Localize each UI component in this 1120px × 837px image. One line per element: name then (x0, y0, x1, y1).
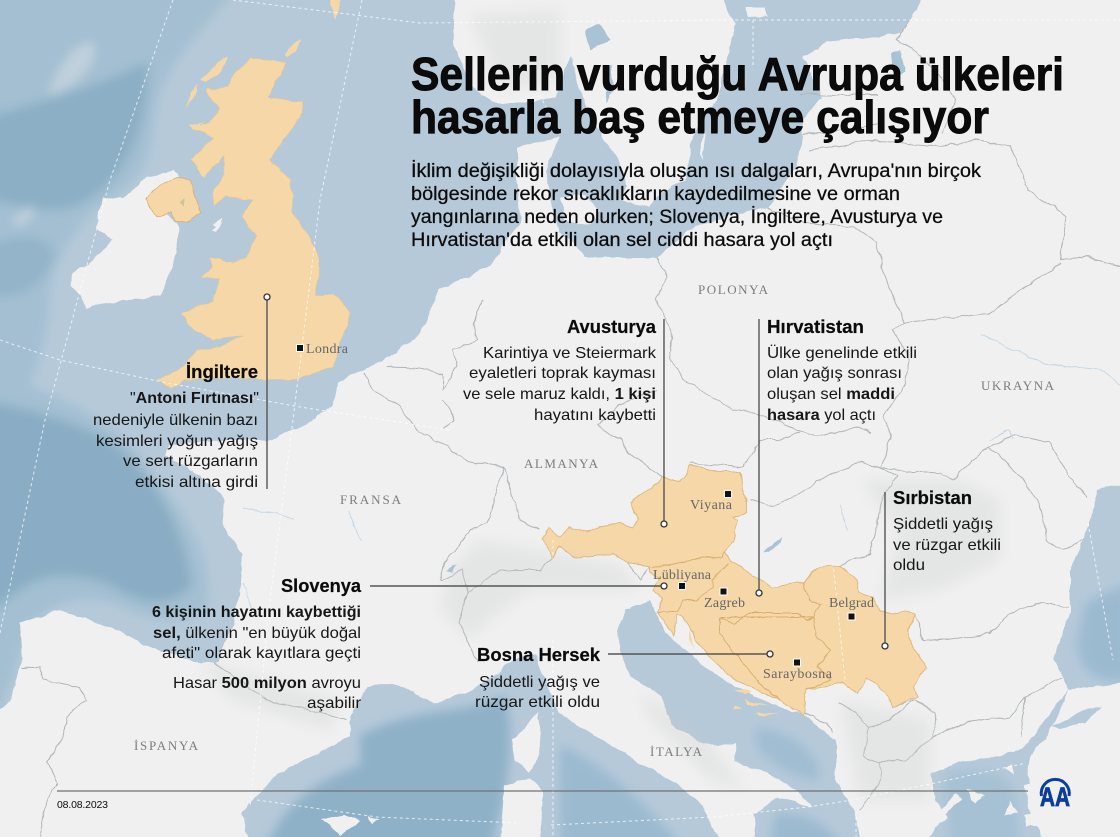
title: Sellerin vurduğu Avrupa ülkeleri (411, 48, 1064, 100)
callout: İngiltere: ve sert rüzgarların (123, 453, 258, 470)
label: Fransa: FRANSA (340, 492, 402, 507)
callout: Sırbistan (882, 488, 1001, 649)
callout: Sırbistan: Sırbistan (893, 488, 972, 508)
intro text: İklim değişikliği dolayısıyla oluşan ısı dalgaları, Avrupa'nın birçok (411, 161, 982, 182)
callout: Avusturya: Karintiya ve Steiermark (483, 345, 657, 362)
mediterranean bathymetry (265, 585, 1120, 837)
region: Britain highlighted (145, 0, 350, 387)
callout: Hırvatistan: olan yağış sonrası (767, 365, 902, 382)
city: Saraybosna: Saraybosna (763, 667, 833, 682)
intro text: Hırvatistan'da etkili olan sel ciddi hasara yol açtı (411, 230, 833, 251)
shape: Scottish islands (187, 0, 343, 178)
callout: Slovenya: Hasar 500 milyon avroyu (173, 675, 361, 692)
city: Viyana (690, 490, 733, 513)
callout: Slovenya: 6 kişinin hayatını kaybettiği (152, 604, 361, 621)
callout: Hırvatistan (756, 317, 917, 596)
label: İtalya: İTALYA (650, 744, 703, 759)
title (411, 48, 1064, 143)
callout: Slovenya: sel, ülkenin "en büyük doğal (153, 625, 361, 642)
label: İspanya: İSPANYA (134, 738, 199, 753)
shape: Dalmatian islands (690, 630, 780, 716)
callout: Hırvatistan: hasara yol açtı (767, 407, 876, 424)
callout: Sırbistan: ve rüzgar etkili (893, 537, 1001, 554)
callout: İngiltere (93, 294, 270, 491)
city: Zagreb: Zagreb (704, 596, 745, 611)
callout: Slovenya (152, 576, 667, 712)
callout: Sırbistan: Şiddetli yağış (893, 516, 993, 533)
intro text: bölgesinde rekor sıcaklıkların kaydedilmesine ve orman (411, 184, 900, 205)
intro text (411, 161, 982, 251)
title: hasarla baş etmeye çalışıyor (411, 91, 989, 143)
land: islands (212, 8, 1040, 835)
label: Almanya: ALMANYA (524, 456, 599, 471)
country labels (134, 282, 1055, 759)
callout: Sırbistan: oldu (893, 557, 925, 574)
callout: Slovenya: Slovenya (281, 576, 362, 596)
land: Ireland (72, 170, 178, 307)
city: Lübliyana (653, 568, 712, 590)
logo: AA: AA (1040, 782, 1070, 812)
label: Polonya: POLONYA (698, 282, 769, 297)
callout: Avusturya (463, 317, 667, 527)
rivers (242, 335, 1120, 610)
date: 08.08.2023 (57, 799, 108, 811)
city: Viyana: Viyana (690, 498, 733, 513)
shape: Great Britain (157, 57, 350, 387)
callout: Avusturya: hayatını kaybetti (534, 407, 656, 424)
label: Ukrayna: UKRAYNA (981, 378, 1055, 393)
callout: Bosna Hersek: Bosna Hersek (477, 645, 601, 665)
callout: İngiltere: kesimleri yoğun yağış (96, 433, 258, 450)
city: Belgrad: Belgrad (829, 596, 874, 611)
callout: Bosna Hersek (475, 645, 773, 711)
city: Belgrad (829, 596, 874, 620)
callout: İngiltere: nedeniyle ülkenin bazı (93, 412, 258, 429)
sea of Marmara and inland waters (445, 25, 1103, 730)
land: Corsica (512, 712, 540, 773)
callout: İngiltere: "Antoni Fırtınası" (130, 390, 259, 407)
callout: Avusturya: ve sele maruz kaldı, 1 kişi (463, 386, 656, 403)
city: Saraybosna (763, 659, 833, 682)
callout: İngiltere: etkisi altına girdi (135, 474, 258, 491)
region: Central Europe highlighted (542, 465, 927, 716)
callout: Slovenya: afeti" olarak kayıtlara geçti (162, 645, 361, 662)
callout: Avusturya: eyaletleri toprak kayması (469, 365, 656, 382)
callout: Hırvatistan: Ülke genelinde etkili (767, 344, 917, 362)
city: Zagreb (704, 588, 745, 611)
intro text: yangınlarına neden olurken; Slovenya, İngiltere, Avusturya ve (411, 207, 943, 228)
shape: Austria Slovenia Croatia Bosnia Serbia (542, 465, 927, 715)
callout: Bosna Hersek: Şiddetli yağış ve (479, 674, 600, 691)
callout: Slovenya: aşabilir (307, 695, 362, 712)
land: Sardinia (500, 778, 543, 837)
capital cities (296, 342, 874, 682)
callout: İngiltere: İngiltere (186, 362, 258, 382)
city: Londra: Londra (306, 342, 349, 357)
callout: Avusturya: Avusturya (567, 317, 657, 337)
shape: Northern Ireland (145, 178, 200, 223)
atlantic bathymetry (0, 0, 242, 740)
land: Scandinavia (453, 0, 735, 207)
callout: Hırvatistan: Hırvatistan (767, 317, 864, 337)
city: Lübliyana: Lübliyana (653, 568, 712, 583)
relief shading (200, 10, 1000, 800)
callout: Hırvatistan: oluşan sel maddi (767, 386, 895, 403)
footer rule (57, 790, 1028, 792)
callout: Bosna Hersek: rüzgar etkili oldu (475, 694, 600, 711)
land: Anatolia and Thrace (1026, 680, 1120, 837)
internal borders (652, 550, 830, 700)
